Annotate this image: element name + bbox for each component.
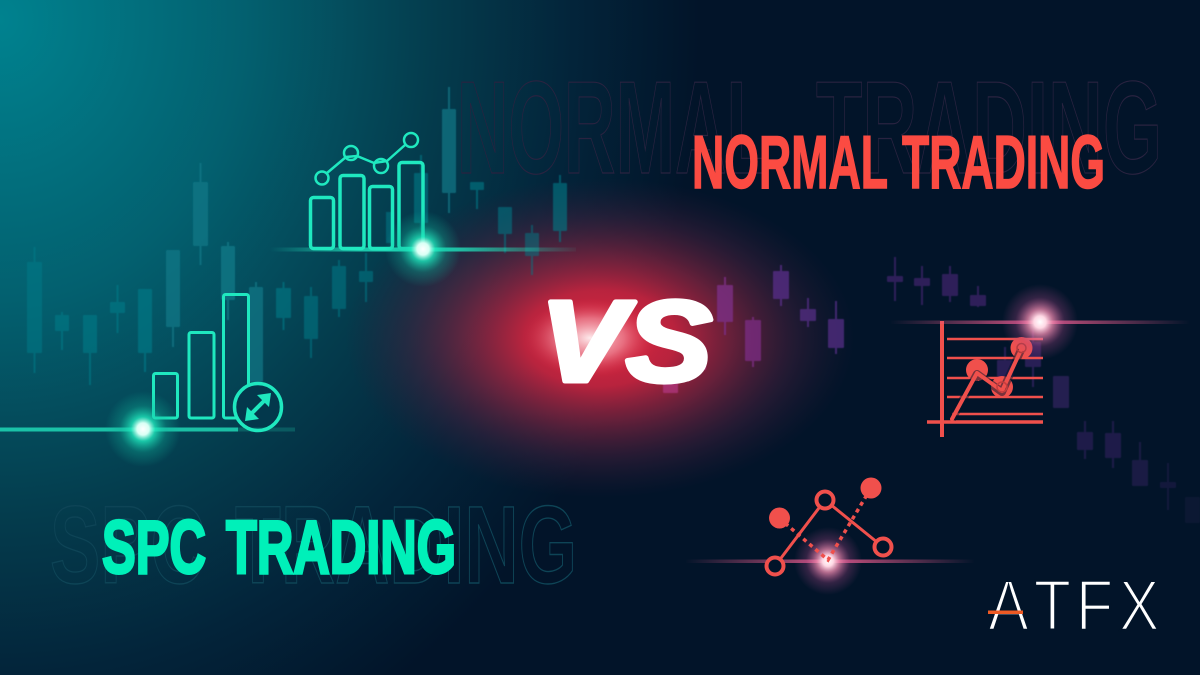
heading: spc trading xyxy=(102,505,456,589)
heading: normal trading: NORMAL xyxy=(692,120,888,204)
red glow behind VS xyxy=(345,178,855,498)
glowing baseline: upper teal xyxy=(270,211,576,287)
glowing baseline: lower pink xyxy=(685,527,975,595)
heading: spc trading: TRADING xyxy=(226,505,456,589)
heading: spc trading: SPC xyxy=(102,505,206,589)
outline title: spc trading: SPC xyxy=(50,484,205,607)
outline title: spc trading: TRADING xyxy=(235,484,577,607)
icon: teal rising bars with arrow badge xyxy=(154,294,282,430)
teal candlesticks xyxy=(27,87,567,392)
purple candlesticks xyxy=(663,257,1200,523)
logo: ATFX: ATFX xyxy=(988,567,1160,646)
glowing baseline: upper pink xyxy=(890,284,1190,360)
icon: teal bars with line chart xyxy=(310,133,423,248)
outline title: spc trading xyxy=(50,484,577,607)
icon: red line chart with grid xyxy=(927,321,1043,437)
VS badge: VS xyxy=(540,278,712,406)
glowing baseline: lower teal xyxy=(0,391,295,467)
outline title: normal trading: NORMAL xyxy=(457,54,770,201)
icon: red network line chart xyxy=(766,478,892,574)
